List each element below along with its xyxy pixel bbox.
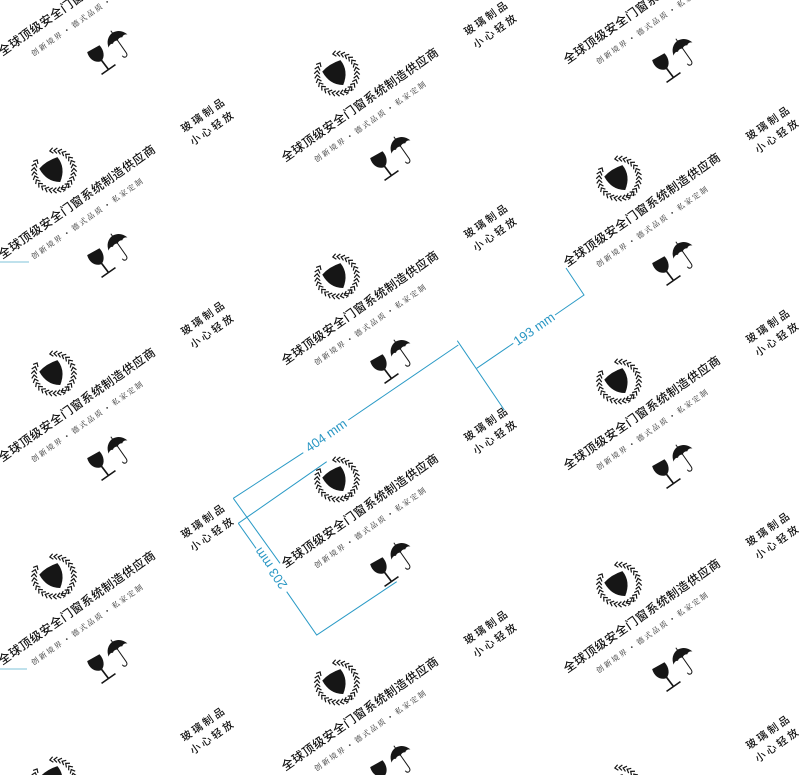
label: handle with care: 小心轻放 xyxy=(753,523,800,562)
icon: laurel shield logo xyxy=(23,140,86,202)
label unit: column 1 row 3 xyxy=(0,343,236,554)
heading: 全球顶级安全门窗系统制造供应商 xyxy=(0,142,158,262)
icon: fragile glass xyxy=(369,758,398,775)
label: handle with care: 小心轻放 xyxy=(753,117,800,156)
label: handle with care: 小心轻放 xyxy=(188,718,236,757)
icon: fragile glass xyxy=(651,254,680,285)
label: handle with care: 小心轻放 xyxy=(753,320,800,359)
label: handle with care: 小心轻放 xyxy=(188,109,236,148)
icon: umbrella xyxy=(384,739,420,775)
icon: fragile glass xyxy=(86,43,115,74)
label: fragile glass: 玻璃制品 xyxy=(179,299,227,338)
heading: 全球顶级安全门窗系统制造供应商 xyxy=(0,548,158,668)
label: fragile glass: 玻璃制品 xyxy=(744,713,792,752)
dimension: 193 mm: 193 mm xyxy=(510,309,558,349)
edge marks xyxy=(0,262,29,669)
icon: fragile glass xyxy=(369,149,398,180)
subheading: 创新境界 • 德式品质 • 私家定制 xyxy=(312,688,428,773)
label: fragile glass: 玻璃制品 xyxy=(179,502,227,541)
heading: 全球顶级安全门窗系统制造供应商 xyxy=(278,451,441,571)
icon: umbrella xyxy=(101,227,137,265)
subheading: 创新境界 • 德式品质 • 私家定制 xyxy=(594,184,710,269)
subheading: 创新境界 • 德式品质 • 私家定制 xyxy=(29,176,145,261)
label: handle with care: 小心轻放 xyxy=(471,418,519,457)
heading: 全球顶级安全门窗系统制造供应商 xyxy=(0,345,158,465)
heading: 全球顶级安全门窗系统制造供应商 xyxy=(278,248,441,368)
label: fragile glass: 玻璃制品 xyxy=(179,96,227,135)
dimension: 203 mm: 203 mm xyxy=(251,545,290,592)
icon: umbrella xyxy=(666,32,702,70)
icon: fragile glass xyxy=(651,457,680,488)
label: handle with care: 小心轻放 xyxy=(471,12,519,51)
icon: laurel shield logo xyxy=(23,343,86,405)
subheading: 创新境界 • 德式品质 • 私家定制 xyxy=(29,379,145,464)
label: fragile glass: 玻璃制品 xyxy=(744,104,792,143)
label: handle with care: 小心轻放 xyxy=(753,726,800,765)
label: handle with care: 小心轻放 xyxy=(188,515,236,554)
label: fragile glass: 玻璃制品 xyxy=(462,608,510,647)
icon: umbrella xyxy=(101,633,137,671)
label: fragile glass: 玻璃制品 xyxy=(744,510,792,549)
icon: fragile glass xyxy=(651,51,680,82)
icon: fragile glass xyxy=(86,449,115,480)
dimension: 203 mm xyxy=(238,523,397,635)
subheading: 创新境界 • 德式品质 • 私家定制 xyxy=(312,282,428,367)
label unit: column 1 row 2 xyxy=(0,140,236,351)
icon: umbrella xyxy=(101,430,137,468)
icon: laurel shield logo xyxy=(588,148,651,210)
icon: laurel shield logo xyxy=(306,246,369,308)
label unit: column 2 row 1 xyxy=(278,43,519,254)
label unit: column 3 row 1 xyxy=(560,0,800,156)
label: handle with care: 小心轻放 xyxy=(471,215,519,254)
icon: fragile glass xyxy=(86,652,115,683)
label: fragile glass: 玻璃制品 xyxy=(744,307,792,346)
icon: umbrella xyxy=(666,438,702,476)
icon: umbrella xyxy=(384,536,420,574)
label unit: column 2 row 2 xyxy=(278,246,519,457)
label: fragile glass: 玻璃制品 xyxy=(462,405,510,444)
subheading: 创新境界 • 德式品质 • 私家定制 xyxy=(594,590,710,675)
label unit: column 3 row 3 xyxy=(560,351,800,562)
label unit: column 2 row 4 xyxy=(278,652,441,775)
heading: 全球顶级安全门窗系统制造供应商 xyxy=(560,353,723,473)
label: handle with care: 小心轻放 xyxy=(471,621,519,660)
label unit: column 3 row 4 xyxy=(560,554,800,765)
subheading: 创新境界 • 德式品质 • 私家定制 xyxy=(312,485,428,570)
icon: laurel shield logo xyxy=(588,554,651,616)
icon: laurel shield logo xyxy=(306,43,369,105)
label: fragile glass: 玻璃制品 xyxy=(179,705,227,744)
icon: umbrella xyxy=(384,333,420,371)
label: handle with care: 小心轻放 xyxy=(188,312,236,351)
icon: fragile glass xyxy=(369,352,398,383)
icon: laurel shield logo xyxy=(23,749,86,775)
heading: 全球顶级安全门窗系统制造供应商 xyxy=(278,654,441,774)
label unit: column 1 bottom partial xyxy=(23,749,86,775)
icon: laurel shield logo xyxy=(588,757,651,775)
label unit: column 3 bottom partial xyxy=(588,757,651,775)
icon: umbrella xyxy=(666,641,702,679)
icon: laurel shield logo xyxy=(306,449,369,511)
icon: umbrella xyxy=(384,130,420,168)
dimension: 404 mm: 404 mm xyxy=(302,416,350,455)
subheading: 创新境界 • 德式品质 • 私家定制 xyxy=(29,582,145,667)
label unit: column 2 top partial xyxy=(462,0,519,51)
heading: 全球顶级安全门窗系统制造供应商 xyxy=(560,150,723,270)
icon: laurel shield logo xyxy=(588,351,651,413)
icon: laurel shield logo xyxy=(306,652,369,714)
icon: fragile glass xyxy=(86,246,115,277)
label unit: column 1 row 1 xyxy=(0,0,236,148)
heading: 全球顶级安全门窗系统制造供应商 xyxy=(278,45,441,165)
label: fragile glass: 玻璃制品 xyxy=(462,202,510,241)
icon: umbrella xyxy=(101,24,137,62)
dimension: 404 mm xyxy=(233,341,504,563)
heading: 全球顶级安全门窗系统制造供应商 xyxy=(560,556,723,676)
label unit: column 2 row 3 xyxy=(278,449,519,660)
label unit: column 3 row 2 xyxy=(560,148,800,359)
icon: laurel shield logo xyxy=(23,546,86,608)
label unit: column 1 row 4 xyxy=(0,546,236,757)
icon: fragile glass xyxy=(369,555,398,586)
subheading: 创新境界 • 德式品质 • 私家定制 xyxy=(594,387,710,472)
label: fragile glass: 玻璃制品 xyxy=(462,0,510,38)
dimension: 193 mm xyxy=(477,268,584,368)
subheading: 创新境界 • 德式品质 • 私家定制 xyxy=(312,79,428,164)
icon: umbrella xyxy=(666,235,702,273)
icon: fragile glass xyxy=(651,660,680,691)
